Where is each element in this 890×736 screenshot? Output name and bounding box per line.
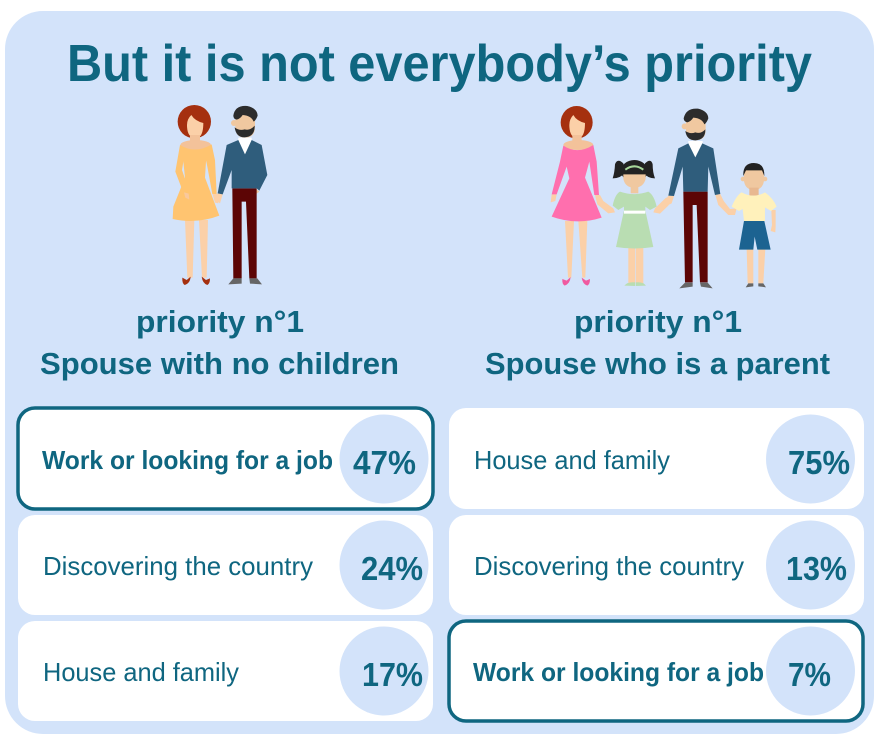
illustration: family with children [551,106,777,288]
left card 1: work, 47%: Work or looking for a job [42,445,333,475]
left card 3: house, 17% [18,621,433,721]
left card 1: work, 47% [18,408,433,509]
right card 3: work, 7%: Work or looking for a job [473,657,764,687]
left card 3: house, 17%: House and family [43,657,239,687]
heading: left column [40,304,399,381]
right card 1: house, 75%: 75% [788,444,850,481]
figure: boy in yellow shirt [717,163,777,287]
right card 1: house, 75% [449,408,864,509]
figure: man in blue sweater [214,106,267,284]
left card 2: discovering, 24%: Discovering the country [43,551,313,581]
heading: right column: Spouse who is a parent [485,346,830,381]
illustration: couple without children [173,105,267,285]
right card 3: work, 7%: 7% [788,656,831,693]
figure: girl in green dress [613,160,672,286]
heading: left column: priority n°1 [136,304,304,339]
left card 2: discovering, 24%: 24% [361,550,423,587]
right card 3: work, 7% [449,621,863,721]
heading: right column [485,304,830,381]
right card 2: discovering, 13% [449,515,864,615]
title: But it is not everybody’s priority [67,35,812,93]
left card 2: discovering, 24% [18,515,433,615]
figure: father in blue sweater [664,109,724,288]
figure: woman in yellow dress [173,105,219,285]
heading: left column: Spouse with no children [40,346,399,381]
right card 2: discovering, 13%: 13% [786,550,847,587]
left card 3: house, 17%: 17% [362,656,423,693]
heading: right column: priority n°1 [574,304,742,339]
figure: woman in pink dress [551,106,615,286]
left card 1: work, 47%: 47% [353,444,416,481]
right card 1: house, 75%: House and family [474,445,670,475]
right card 2: discovering, 13%: Discovering the country [474,551,744,581]
